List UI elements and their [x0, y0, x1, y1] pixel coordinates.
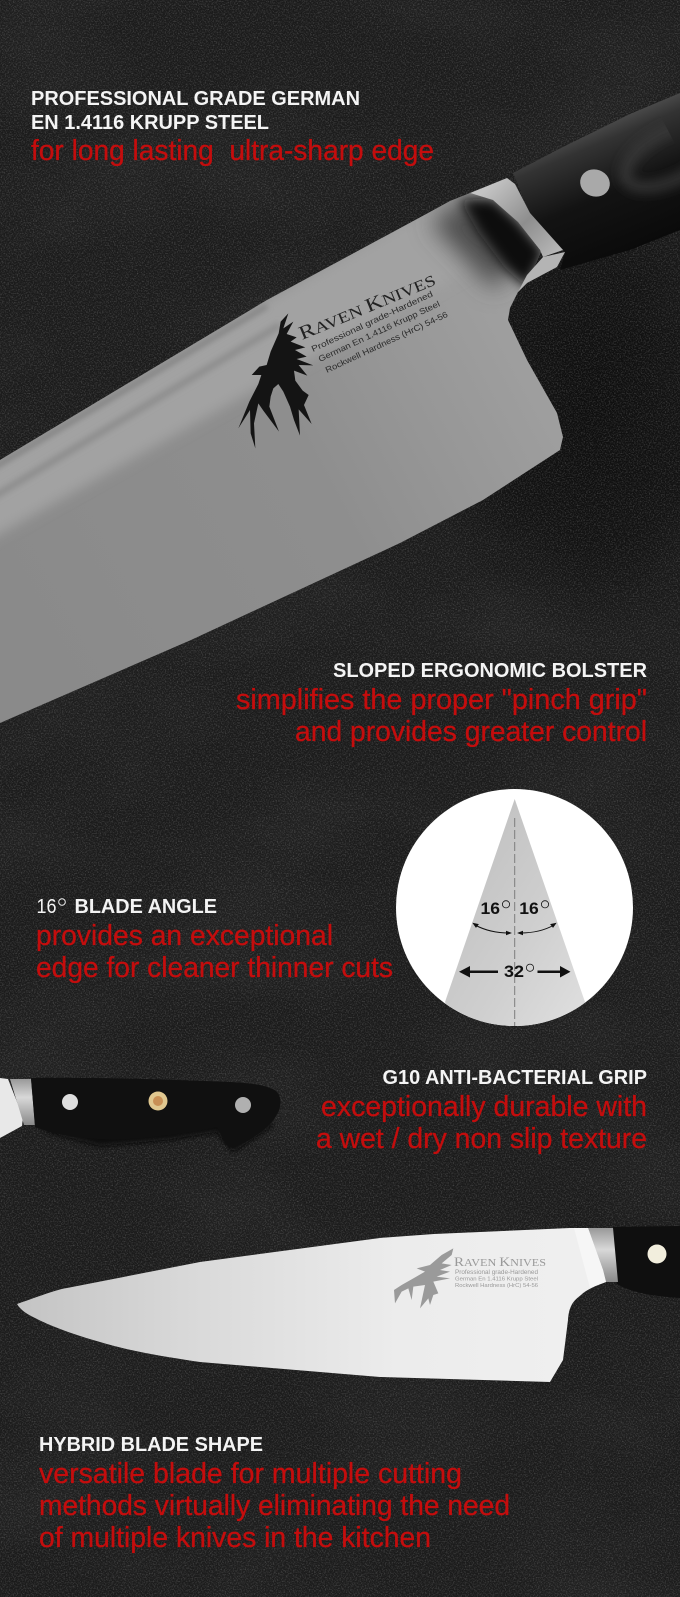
16 degree labels — [480, 899, 549, 918]
handle body — [31, 1078, 281, 1148]
engraved brand text: Professional grade-Hardened — [455, 1269, 538, 1276]
blade cross-section wedge — [445, 799, 585, 1030]
engraved brand text: German En 1.4116 Krupp Steel — [317, 298, 442, 364]
blade — [17, 1228, 606, 1382]
knife 1 silver bolster ring — [470, 178, 565, 292]
callout: hybrid blade shape — [39, 1433, 510, 1554]
callout: sloped ergonomic bolster — [236, 659, 647, 748]
callout: 16 degree blade angle: BLADE ANGLE — [74, 895, 217, 918]
handle rivet — [576, 165, 614, 201]
callout: G10 grip: a wet / dry non slip texture — [316, 1123, 647, 1155]
engraved brand text — [296, 269, 450, 375]
callout: 16 degree blade angle — [36, 895, 393, 984]
callout: G10 grip: exceptionally durable with — [321, 1091, 647, 1123]
16 degree labels: 16 — [519, 899, 539, 918]
dashed centre line — [514, 818, 516, 1026]
knife 2: G10 handle — [0, 1078, 281, 1152]
engraved brand text: RAVEN KNIVES — [454, 1254, 546, 1269]
engraved brand text: Rockwell Hardness (HrC) 54-56 — [324, 309, 450, 375]
callout: hybrid blade shape: of multiple knives in the kitchen — [39, 1522, 431, 1554]
engraved brand text: Professional grade-Hardened — [310, 288, 435, 354]
raven logo, grey — [394, 1248, 453, 1308]
blade angle diagram — [396, 789, 633, 1030]
engraved brand text: Rockwell Hardness (HrC) 54-56 — [455, 1283, 538, 1289]
knife 3: full blade profile — [17, 1226, 680, 1382]
callout: G10 grip — [316, 1066, 647, 1155]
white circle — [396, 789, 633, 1026]
knife 1 handle — [513, 93, 680, 270]
handle — [613, 1226, 680, 1298]
callout: sloped ergonomic bolster: and provides greater control — [295, 716, 647, 748]
mosaic pin — [148, 1092, 168, 1110]
16 degree labels: 16 — [480, 899, 500, 918]
callout: Krupp steel: for long lasting ultra-sharp edge — [31, 135, 434, 167]
callout: 16 degree blade angle: provides an exceptional — [36, 920, 333, 952]
callout: 16 degree blade angle: 16 — [36, 895, 56, 918]
32 degree label and arrows — [459, 962, 570, 981]
silver ferrule — [586, 1228, 618, 1282]
rivet — [235, 1097, 251, 1113]
callout: G10 grip: G10 ANTI-BACTERIAL GRIP — [382, 1066, 647, 1089]
curved arrows — [474, 924, 556, 934]
engraved brand text — [454, 1254, 546, 1289]
callout: Krupp steel: PROFESSIONAL GRADE GERMAN — [31, 87, 360, 110]
knife 1 blade — [0, 193, 563, 723]
callout: sloped ergonomic bolster: simplifies the proper "pinch grip" — [236, 684, 647, 716]
32 degree label and arrows: 32 — [504, 962, 524, 981]
callout: 16 degree blade angle: edge for cleaner thinner cuts — [36, 952, 393, 984]
raven logo on blade — [238, 313, 313, 448]
callout: Krupp steel: EN 1.4116 KRUPP STEEL — [31, 111, 269, 134]
silver bolster — [10, 1079, 35, 1125]
engraved brand text: RAVEN KNIVES — [296, 269, 439, 345]
callout: hybrid blade shape: methods virtually eliminating the need — [39, 1490, 510, 1522]
shadow below handle — [40, 1120, 275, 1152]
knife 1: close-up of blade, bolster and handle — [0, 93, 680, 723]
callout: hybrid blade shape: versatile blade for multiple cutting — [39, 1458, 462, 1490]
engraved brand text: German En 1.4116 Krupp Steel — [455, 1276, 538, 1282]
callout: Krupp steel — [31, 87, 434, 167]
callout: hybrid blade shape: HYBRID BLADE SHAPE — [39, 1433, 263, 1456]
callout: sloped ergonomic bolster: SLOPED ERGONOMIC BOLSTER — [333, 659, 647, 682]
blade stub — [0, 1078, 23, 1138]
rivet — [62, 1094, 78, 1110]
